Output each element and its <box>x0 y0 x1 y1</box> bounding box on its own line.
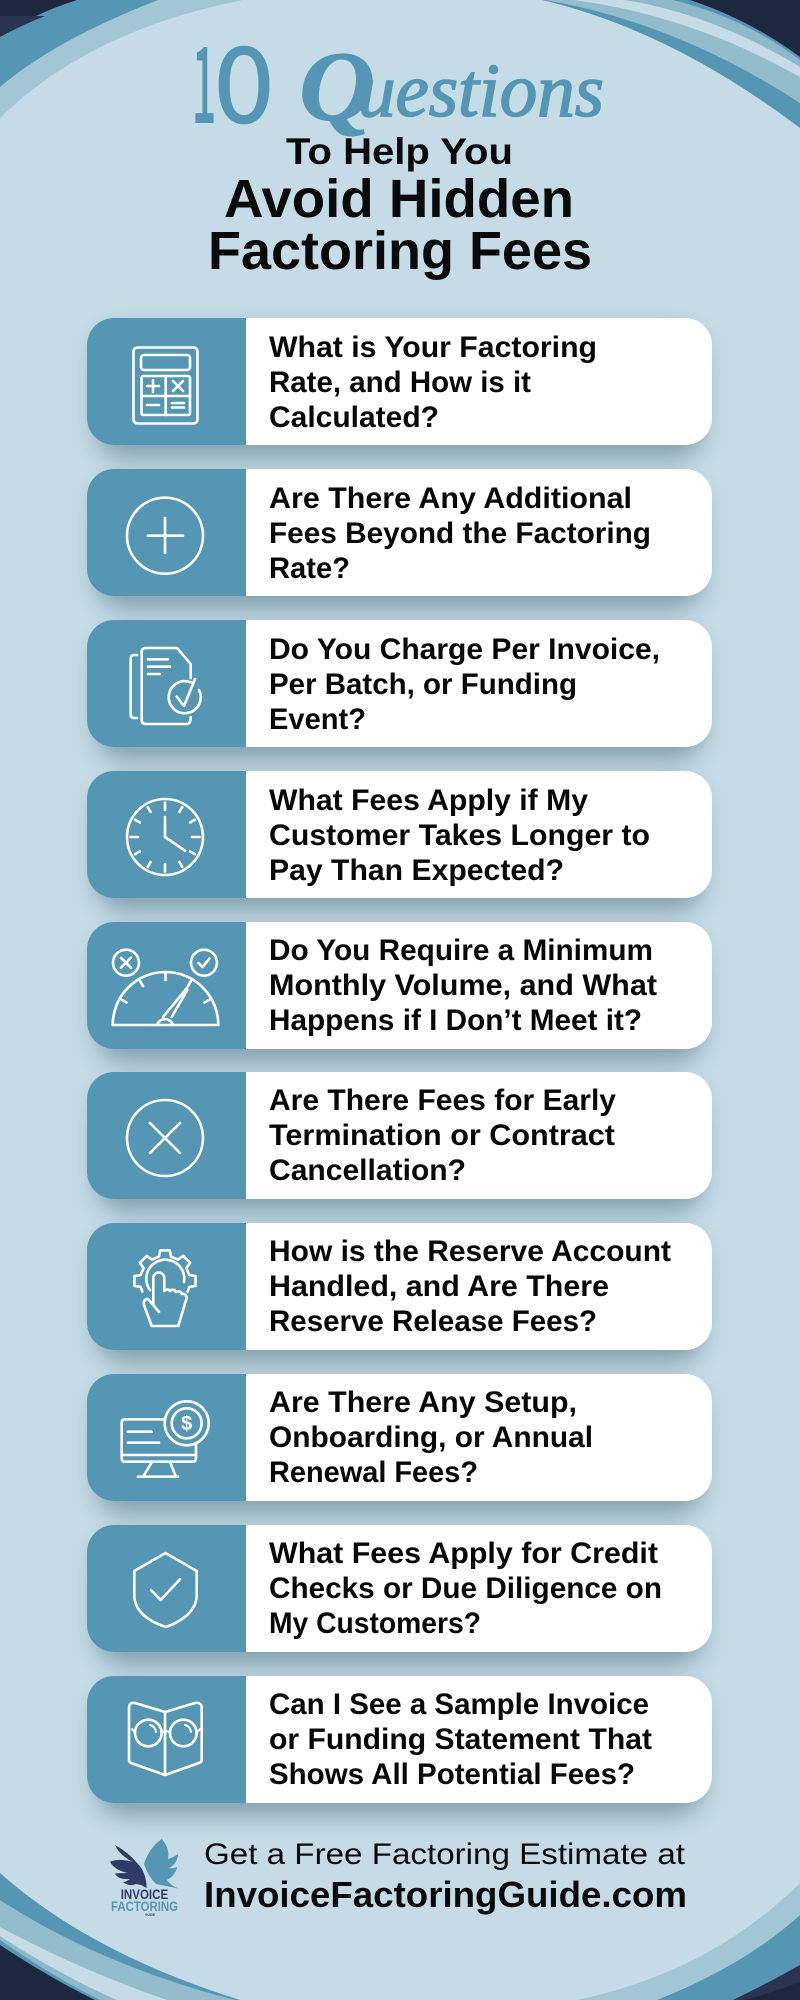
icon: clock <box>127 799 203 875</box>
icon: x in circle <box>127 1100 203 1176</box>
icon: gear and pointing hand <box>134 1250 196 1326</box>
panel: question 1 <box>87 318 712 457</box>
question text: Per Batch, or Funding <box>269 668 577 701</box>
call to action <box>204 1838 687 1915</box>
question text: Happens if I Don’t Meet it? <box>269 1004 642 1037</box>
question text: Shows All Potential Fees? <box>269 1758 635 1791</box>
title: 10 Questions: 0 <box>214 1 274 152</box>
question text: Are There Any Setup, <box>269 1386 577 1419</box>
logo: Invoice Factoring Guide: FACTORING <box>111 1899 178 1914</box>
question text: Customer Takes Longer to <box>269 819 650 852</box>
top-left corner swoosh <box>0 0 243 118</box>
title: 10 Questions: uestions <box>358 49 604 133</box>
icon: document with check <box>131 648 201 724</box>
question text: or Funding Statement That <box>269 1723 652 1756</box>
icon glyph: dollar: $ <box>181 1413 192 1435</box>
question text: Renewal Fees? <box>269 1456 478 1489</box>
question text: What Fees Apply if My <box>269 784 588 817</box>
question text: Fees Beyond the Factoring <box>269 517 651 550</box>
question text: Calculated? <box>269 401 439 434</box>
heading: Avoid Hidden <box>224 169 574 229</box>
icon: shield with check <box>134 1553 197 1627</box>
question text: Do You Require a Minimum <box>269 934 653 967</box>
icon: plus in circle <box>127 498 203 574</box>
title: 10 Questions: 1 <box>192 1 216 152</box>
logo wordmark: INVOICE <box>121 1887 168 1902</box>
question text: What Fees Apply for Credit <box>269 1537 658 1570</box>
question text: My Customers? <box>269 1607 481 1640</box>
title: 10 Questions: Q <box>299 31 375 142</box>
question text: Rate? <box>269 552 350 585</box>
panel: question 7 <box>87 1223 712 1362</box>
call to action: InvoiceFactoringGuide.com <box>204 1874 687 1915</box>
heading <box>208 131 592 281</box>
icon: book with glasses <box>129 1703 202 1775</box>
logo: Invoice Factoring Guide <box>110 1839 178 1917</box>
bottom-left corner swoosh <box>0 1873 240 2000</box>
question text: What is Your Factoring <box>269 331 597 364</box>
panel: question 8 <box>87 1374 712 1513</box>
logo: Invoice Factoring Guide: GUIDE <box>145 1912 155 1917</box>
question text: Handled, and Are There <box>269 1270 609 1303</box>
heading: To Help You <box>286 131 513 172</box>
question text: Rate, and How is it <box>269 366 531 399</box>
panel: question 6 <box>87 1072 712 1211</box>
question text: Cancellation? <box>269 1154 466 1187</box>
question text: Are There Any Additional <box>269 482 632 515</box>
icon: gauge <box>113 950 218 1025</box>
heading: Factoring Fees <box>208 221 592 281</box>
question text: Reserve Release Fees? <box>269 1305 597 1338</box>
question text: Event? <box>269 703 366 736</box>
question text: Termination or Contract <box>269 1119 615 1152</box>
logo icon: left wing <box>110 1845 147 1888</box>
question text: Are There Fees for Early <box>269 1084 616 1117</box>
call to action: Get a Free Factoring Estimate at <box>204 1838 686 1871</box>
bottom-right corner swoosh <box>577 1883 800 2000</box>
panel: question 9 <box>87 1525 712 1664</box>
icon: monitor with dollar coin <box>122 1401 209 1477</box>
panel: question 2 <box>87 469 712 608</box>
panel: question 3 <box>87 620 712 759</box>
icon: calculator <box>134 348 198 424</box>
question text: How is the Reserve Account <box>269 1235 671 1268</box>
question text: Pay Than Expected? <box>269 854 564 887</box>
question text: Checks or Due Diligence on <box>269 1572 662 1605</box>
question text: Monthly Volume, and What <box>269 969 657 1002</box>
panel: question 4 <box>87 771 712 910</box>
question text: Can I See a Sample Invoice <box>269 1688 649 1721</box>
top-right corner swoosh <box>542 0 800 128</box>
question text: Onboarding, or Annual <box>269 1421 593 1454</box>
panel: question 10 <box>87 1676 712 1815</box>
title: 10 Questions <box>192 1 604 152</box>
logo icon: right wing <box>144 1839 178 1888</box>
question text: Do You Charge Per Invoice, <box>269 633 660 666</box>
panel: question 5 <box>87 922 712 1061</box>
